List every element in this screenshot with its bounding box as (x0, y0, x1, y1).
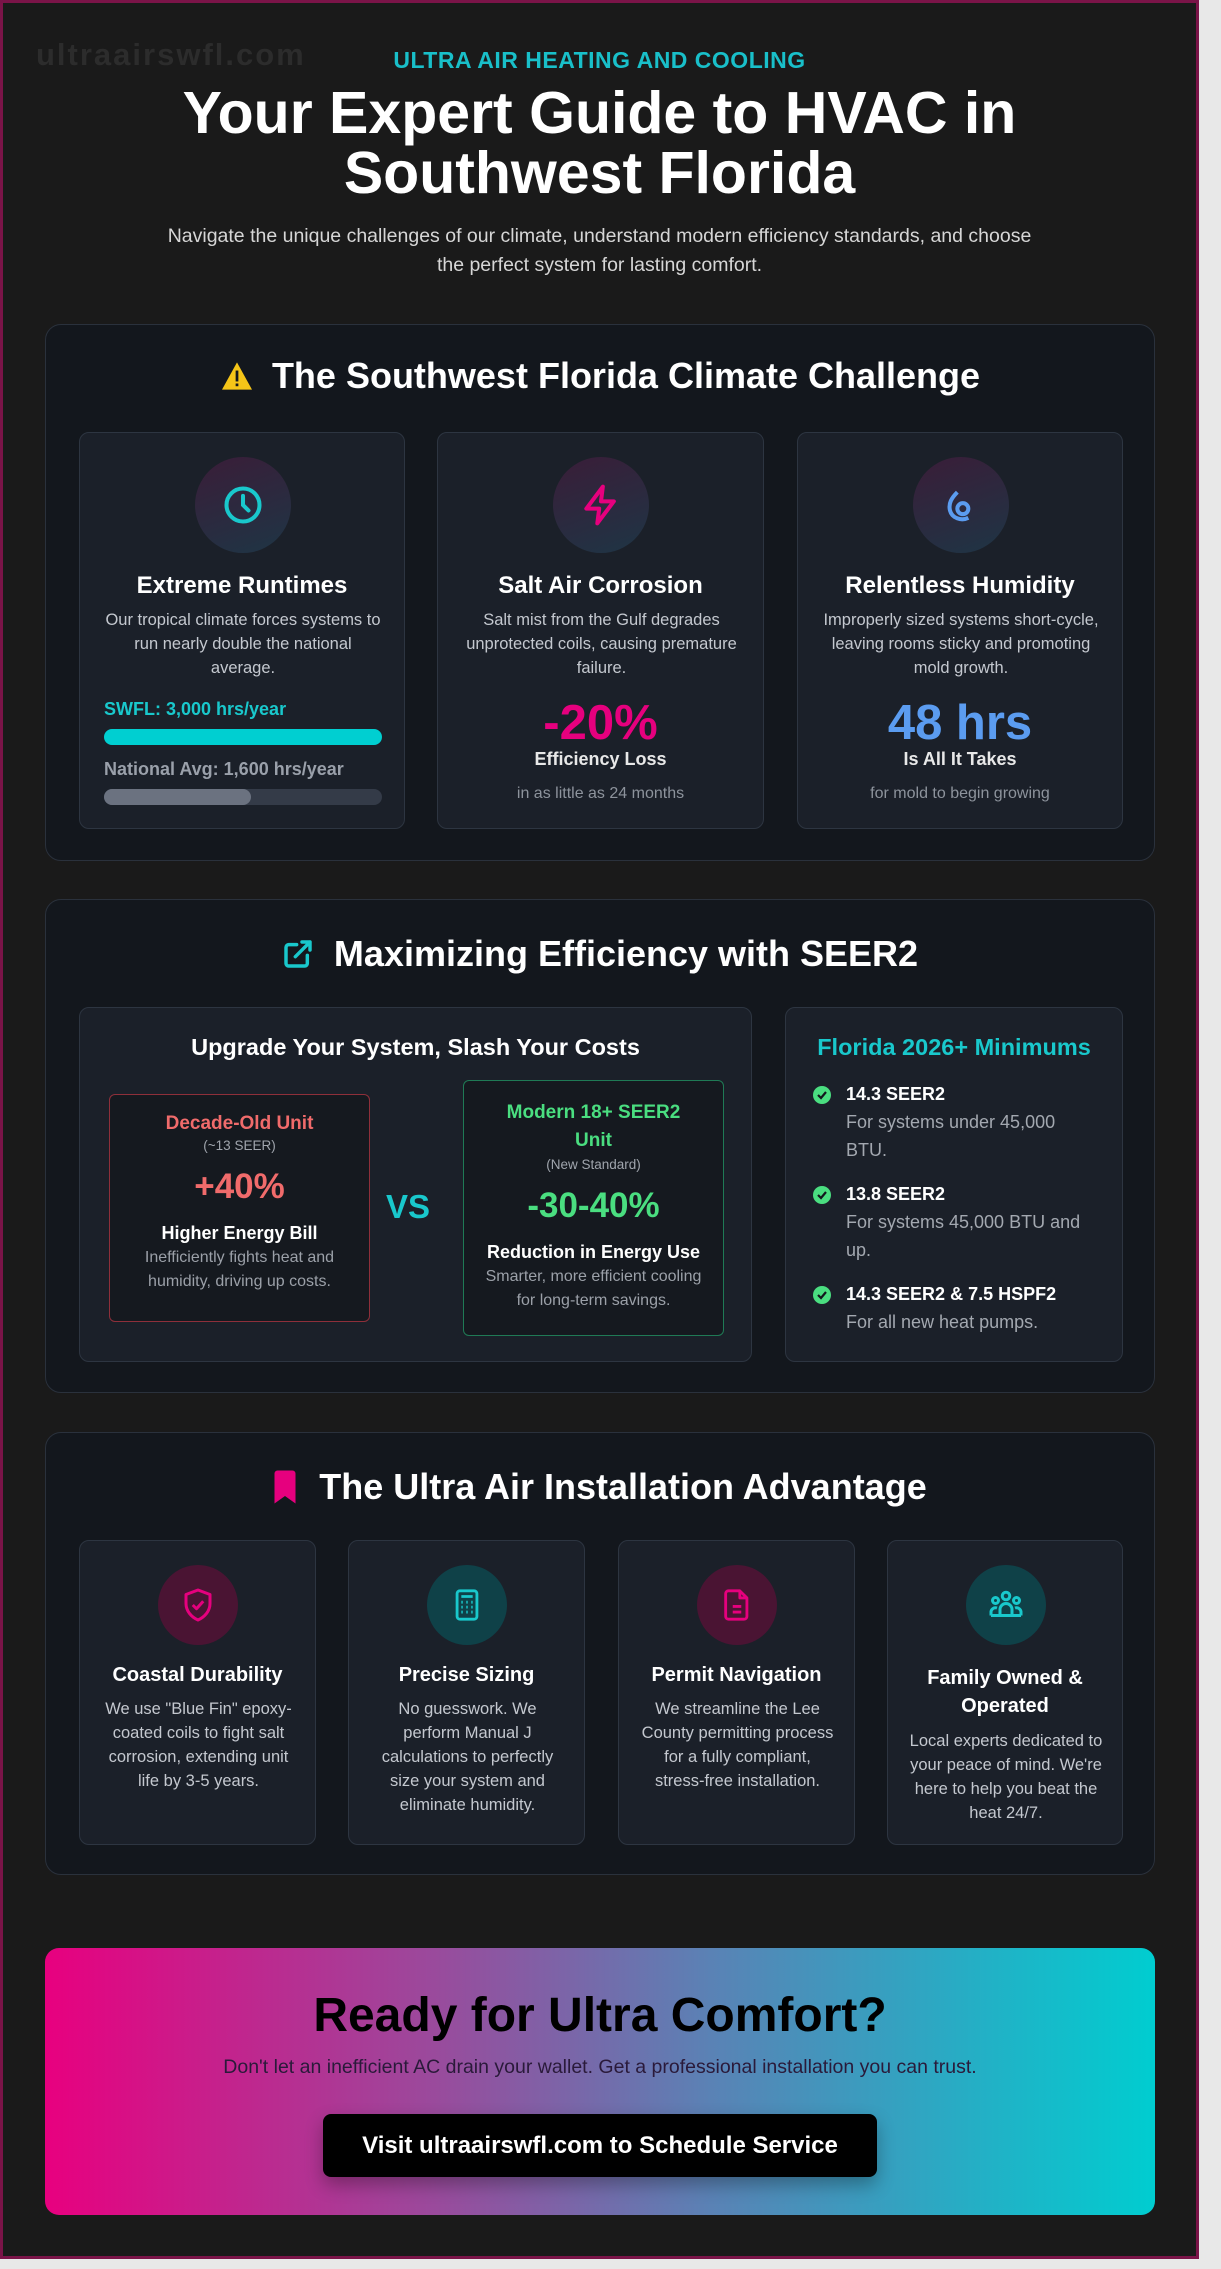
CTA title: Ready for Ultra Comfort? (313, 1989, 887, 2042)
title (183, 80, 1016, 206)
modern unit box: Unit (575, 1130, 612, 1151)
card: humidity: for mold to begin growing (870, 785, 1050, 802)
card: salt air: Efficiency Loss (534, 749, 667, 769)
card: salt air: Salt mist from the Gulf degrades unprotected coils, causing premature failure. (466, 611, 737, 677)
card: humidity: Improperly sized systems short-cycle, leaving rooms sticky and promoting mold growth. (823, 611, 1099, 677)
card: family owned: Family Owned & (927, 1667, 1083, 1689)
card: upgrade comparison: Upgrade Your System, Slash Your Costs (191, 1034, 640, 1060)
old unit box: humidity, driving up costs. (148, 1273, 331, 1290)
list: minimums: 13.8 SEER2 (846, 1184, 945, 1204)
card: permit navigation: Permit Navigation (651, 1664, 822, 1686)
card: humidity: 48 hrs (888, 696, 1032, 750)
list: minimums: 14.3 SEER2 (846, 1084, 945, 1104)
CTA button (323, 2114, 877, 2177)
old unit box: Inefficiently fights heat and (145, 1249, 334, 1266)
card: family owned (887, 1540, 1123, 1845)
list: minimums: For systems under 45,000 (846, 1112, 1055, 1132)
title: Southwest Florida (344, 140, 855, 206)
card: coastal durability: We use "Blue Fin" epoxy-coated coils to fight salt corrosion, extending unit life by 3-5 years. (105, 1700, 292, 1790)
card: Florida minimums: Florida 2026+ Minimums (817, 1034, 1091, 1060)
modern unit box: for long-term savings. (517, 1292, 670, 1309)
heading: climate: The Southwest Florida Climate Challenge (272, 355, 980, 396)
card: extreme runtimes: run nearly double the national (134, 635, 352, 653)
CTA text: Don't let an inefficient AC drain your wallet. Get a professional installation you can trust. (223, 2056, 977, 2078)
bar chart: runtime: National Avg: 1,600 hrs/year (104, 759, 344, 779)
card: precise sizing: No guesswork. We perform Manual J calculations to perfectly size your system and eliminate humidity. (382, 1700, 553, 1814)
CTA banner (45, 1948, 1155, 2215)
bar chart: runtime (104, 699, 382, 805)
heading: SEER2: Maximizing Efficiency with SEER2 (334, 933, 918, 974)
panel: SEER2 (45, 899, 1155, 1393)
bar chart: runtime: SWFL: 3,000 hrs/year (104, 699, 286, 719)
card: coastal durability: Coastal Durability (112, 1664, 283, 1686)
CTA button: Visit ultraairswfl.com to Schedule Service (362, 2132, 838, 2159)
card: coastal durability (79, 1540, 316, 1845)
card: permit navigation: We streamline the Lee County permitting process for a fully compliant, stress-free installation. (642, 1700, 833, 1790)
list: minimums: up. (846, 1240, 871, 1260)
card: salt air: Salt Air Corrosion (498, 572, 703, 599)
vs: VS (386, 1188, 430, 1225)
card: precise sizing (348, 1540, 585, 1845)
intro text: Navigate the unique challenges of our climate, understand modern efficiency standards, and choose the perfect system for lasting comfort. (168, 225, 1031, 276)
modern unit box: Reduction in Energy Use (487, 1242, 700, 1262)
icon: people (966, 1565, 1046, 1645)
card: humidity (797, 432, 1123, 829)
modern unit box: -30-40% (527, 1186, 660, 1225)
card: salt air: -20% (543, 696, 658, 750)
list: minimums (813, 1084, 1080, 1332)
card: humidity: Relentless Humidity (845, 572, 1075, 599)
title: Your Expert Guide to HVAC in (183, 80, 1016, 146)
card: humidity: Is All It Takes (903, 749, 1017, 769)
modern unit box (463, 1080, 724, 1336)
card: salt air: in as little as 24 months (517, 785, 684, 802)
list: minimums: 14.3 SEER2 & 7.5 HSPF2 (846, 1284, 1056, 1304)
list: minimums: For systems 45,000 BTU and (846, 1212, 1080, 1232)
old unit box: Higher Energy Bill (161, 1223, 318, 1243)
card: Florida minimums (785, 1007, 1123, 1362)
card: family owned: Local experts dedicated to your peace of mind. We're here to help you beat the heat 24/7. (910, 1732, 1102, 1822)
panel: installation advantage (45, 1432, 1155, 1875)
panel: climate challenge (45, 324, 1155, 861)
icon: bolt (553, 457, 649, 553)
watermark: ultraairswfl.com (36, 37, 306, 72)
icon: shield (158, 1565, 238, 1645)
icon: document (697, 1565, 777, 1645)
old unit box: +40% (194, 1167, 285, 1206)
card: extreme runtimes: Our tropical climate forces systems to (105, 611, 381, 629)
modern unit box: (New Standard) (546, 1157, 641, 1172)
old unit box (109, 1094, 370, 1322)
card: family owned: Operated (961, 1695, 1049, 1717)
modern unit box: Smarter, more efficient cooling (486, 1268, 701, 1285)
old unit box: Decade-Old Unit (166, 1113, 313, 1134)
card: upgrade comparison (79, 1007, 752, 1362)
card: salt air (437, 432, 764, 829)
icon: clock (195, 457, 291, 553)
card: precise sizing: Precise Sizing (399, 1664, 534, 1686)
list: minimums: For all new heat pumps. (846, 1312, 1038, 1332)
old unit box: (~13 SEER) (203, 1138, 276, 1153)
eyebrow: ULTRA AIR HEATING AND COOLING (393, 47, 806, 73)
card: permit navigation (618, 1540, 855, 1845)
card: extreme runtimes: Extreme Runtimes (137, 572, 347, 599)
modern unit box: Modern 18+ SEER2 (507, 1102, 680, 1123)
heading: advantage: The Ultra Air Installation Advantage (319, 1466, 927, 1507)
card: extreme runtimes (79, 432, 405, 829)
icon: calculator (427, 1565, 507, 1645)
card: extreme runtimes: average. (211, 659, 275, 677)
list: minimums: BTU. (846, 1140, 887, 1160)
icon: drop (913, 457, 1009, 553)
